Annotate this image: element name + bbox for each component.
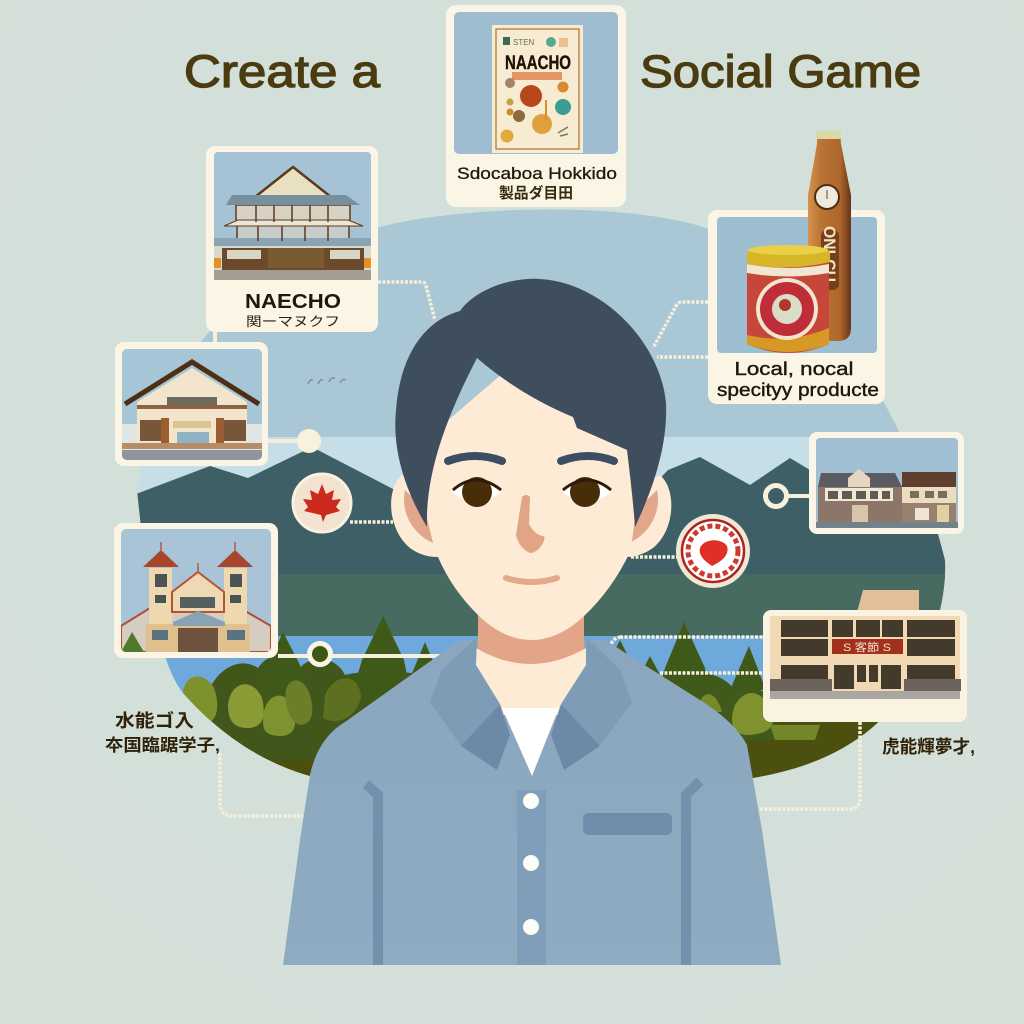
node: ring right	[766, 486, 786, 506]
pocket	[583, 813, 672, 835]
card image	[122, 349, 262, 460]
badge: maple leaf	[293, 474, 351, 532]
card image area	[454, 12, 618, 154]
forest mass right	[706, 674, 780, 740]
card caption line 2: specityy producte	[717, 380, 879, 400]
card caption: NAECHO	[245, 291, 341, 313]
person	[283, 279, 781, 965]
bushes	[183, 677, 820, 740]
neck highlight	[473, 648, 590, 715]
mountains	[120, 447, 960, 580]
card image	[816, 438, 958, 528]
far shore	[278, 574, 945, 636]
pine trees	[274, 616, 763, 690]
can	[747, 245, 830, 353]
button 1	[523, 793, 539, 809]
hair	[395, 279, 666, 527]
side note left line 1: 水能ゴ入	[115, 710, 194, 731]
neck	[478, 605, 584, 710]
card: top poster	[446, 5, 626, 207]
solid connectors	[215, 332, 809, 656]
placket	[517, 790, 546, 965]
card caption japanese: 関ーマヌクフ	[246, 314, 340, 329]
building	[121, 542, 271, 652]
card: twin tower hall	[114, 523, 278, 658]
side note left line 2: 夲国臨踞学子,	[105, 735, 220, 755]
lake	[166, 636, 763, 716]
left eyebrow	[448, 456, 502, 461]
building	[214, 167, 371, 280]
left inner ear	[404, 490, 433, 543]
face	[425, 350, 637, 640]
card: local specialty products	[708, 131, 885, 404]
forest ground	[190, 700, 878, 778]
side note right: 虎能輝夢才,	[882, 737, 975, 757]
button 2	[523, 855, 539, 871]
building	[122, 362, 262, 460]
card caption: Sdocaboa Hokkido	[457, 164, 617, 183]
connectors	[215, 282, 860, 816]
horizon haze	[137, 437, 810, 494]
right strap	[686, 781, 700, 965]
mouth	[506, 578, 557, 582]
badge: red seal	[676, 514, 750, 588]
dotted connectors	[220, 282, 860, 816]
left eye	[452, 477, 501, 507]
button 3	[523, 919, 539, 935]
node: dot left	[297, 429, 321, 453]
node: ring lake	[310, 644, 330, 664]
poster: STEN	[513, 38, 535, 47]
poster	[492, 25, 583, 153]
card image	[717, 217, 877, 353]
card caption japanese: 製品ダ目田	[499, 184, 573, 202]
title: left part: Create a	[184, 46, 381, 97]
right eye	[563, 477, 611, 507]
collar left	[430, 637, 500, 746]
white t-shirt	[502, 708, 559, 776]
bottle: ONLCU	[820, 226, 839, 282]
card: NAECHO building	[206, 146, 378, 332]
collar shadows	[461, 704, 600, 770]
houses	[816, 469, 958, 528]
card: wooden station	[115, 342, 268, 466]
card image	[214, 152, 371, 280]
store building: S 客節 S	[843, 640, 891, 654]
right ear	[626, 475, 671, 557]
card caption line 1: Local, nocal	[734, 359, 854, 379]
bottle	[808, 131, 851, 341]
card image	[121, 529, 271, 652]
card: town houses	[809, 432, 964, 534]
landscape scene	[120, 200, 960, 800]
right inner ear	[629, 490, 658, 543]
right eyebrow	[561, 456, 614, 461]
nose	[516, 495, 544, 553]
card: store	[763, 610, 967, 722]
store building	[770, 616, 961, 699]
birds	[308, 378, 346, 384]
left strap	[366, 784, 378, 965]
poster: NAACHO	[505, 53, 571, 74]
shirt body	[283, 640, 781, 965]
title: right part: Social Game	[640, 46, 921, 97]
collar right	[561, 637, 632, 746]
sky	[201, 210, 899, 437]
left ear	[391, 475, 438, 557]
forest mass left	[205, 658, 412, 760]
rooftop box behind store	[857, 590, 919, 612]
